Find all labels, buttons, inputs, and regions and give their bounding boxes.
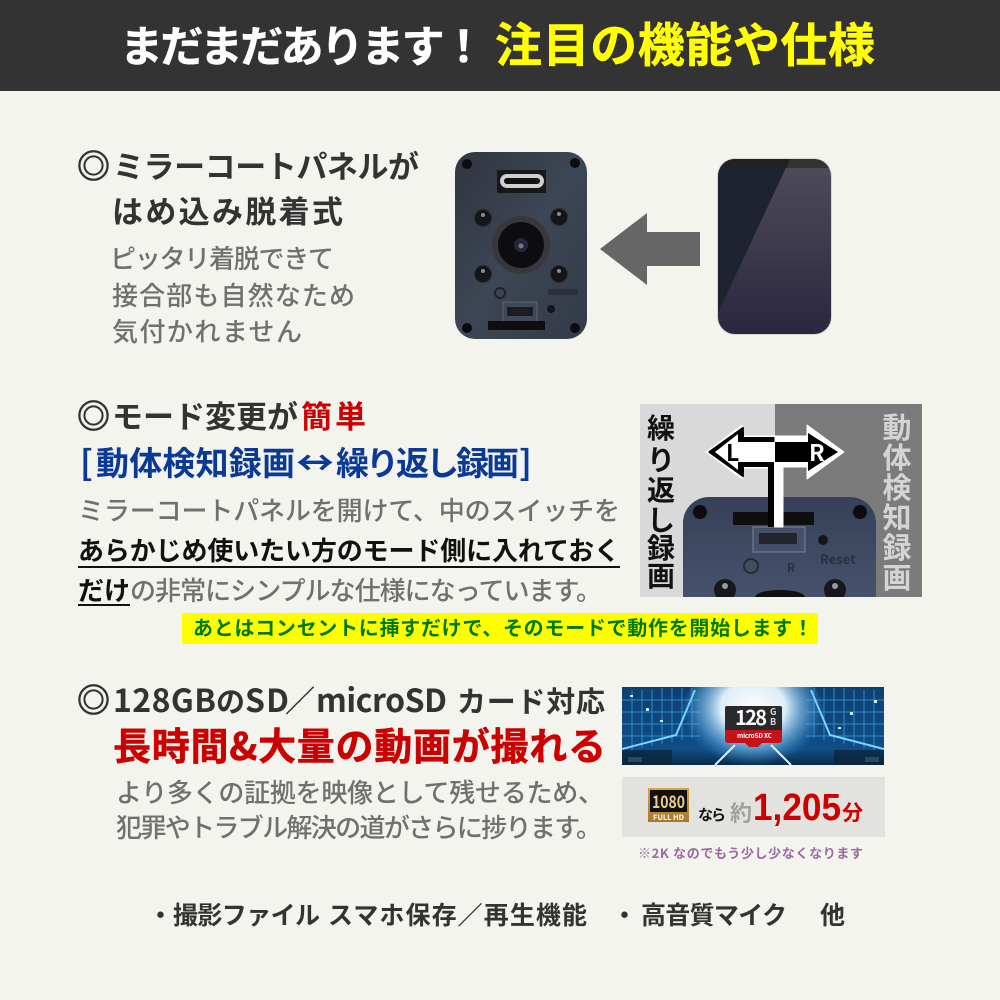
title banner: まだまだあります！ <box>120 13 485 75</box>
footer feature list: 高音質マイク <box>641 896 787 932</box>
capacity panel: なら <box>698 804 726 825</box>
section 2 body text <box>78 491 620 608</box>
lens <box>492 216 550 274</box>
section 3 heading: の <box>216 679 245 721</box>
section 2 heading: [ <box>80 436 93 485</box>
footer feature list <box>148 896 845 932</box>
section 1 heading: ◎ <box>77 140 110 188</box>
camera close-up <box>683 497 876 601</box>
camera close-up: R <box>787 559 795 576</box>
label: repeat recording: し <box>647 499 675 539</box>
label: repeat recording <box>647 407 675 595</box>
microSD card: B <box>770 715 776 728</box>
label: repeat recording: 返 <box>647 469 675 509</box>
screws <box>474 208 568 282</box>
image: 128GB microSD banner <box>622 687 884 765</box>
microSD card: microSD XC <box>737 730 773 740</box>
section 1 body text <box>110 239 355 349</box>
arrow: panel to module <box>600 213 700 285</box>
section 3 body text: 犯罪やトラブル解決の道がさらに捗ります。 <box>116 808 602 845</box>
title banner <box>0 0 1000 91</box>
section 2 body text: あらかじめ使いたい方のモード側に入れておく <box>78 531 620 568</box>
label: repeat recording: 繰 <box>647 407 675 447</box>
microSD card <box>725 702 782 747</box>
section 2 heading: ] <box>519 436 532 485</box>
section 2 heading <box>77 390 532 485</box>
L/R double arrow <box>706 425 844 527</box>
section 2 heading: ↔ <box>296 437 334 485</box>
capacity panel: 約 <box>730 796 752 828</box>
section 3 heading: ／ <box>285 677 315 721</box>
section 3 heading: ◎ <box>77 674 110 722</box>
capacity panel: 1,205 <box>753 787 841 829</box>
section 3 body text: より多くの証拠を映像として残せるため、 <box>116 773 604 810</box>
section 3 heading: カード対応 <box>457 679 605 721</box>
usb-c port <box>497 170 546 193</box>
badge: 1080 full hd <box>648 788 689 823</box>
label: motion detection recording: 動 <box>882 405 912 447</box>
section 1 heading: はめ込み脱着式 <box>112 187 343 232</box>
image: camera module <box>455 152 587 339</box>
title banner: 注目の機能や仕様 <box>495 7 875 76</box>
section 3 heading: 長時間&大量の動画が撮れる <box>113 716 606 771</box>
footer feature list: 撮影ファイル <box>173 896 320 932</box>
section 1 body text: 気付かれません <box>112 312 302 349</box>
section 2 body text: だけ <box>78 571 130 608</box>
section 1 heading <box>77 140 419 232</box>
L/R double arrow: L <box>726 434 739 468</box>
footer feature list: ・ <box>148 896 173 932</box>
section 2 body text: の非常にシンプルな仕様になっています。 <box>130 571 602 608</box>
label: motion detection recording: 知 <box>882 495 912 537</box>
microSD card: 128 <box>735 702 767 731</box>
capacity panel: 分 <box>842 797 863 827</box>
callout: yellow note: あとはコンセントに挿すだけで、そのモードで動作を開始します！ <box>193 612 813 641</box>
image: mode switch diagram <box>640 404 922 601</box>
section 2 heading: モード変更が <box>112 392 298 437</box>
label: motion detection recording: 録 <box>882 525 912 567</box>
section 1 body text: 接合部も自然なため <box>112 276 355 313</box>
label: repeat recording: 録 <box>647 527 675 567</box>
section 1 heading: ミラーコートパネルが <box>113 142 419 187</box>
label: repeat recording: り <box>647 439 675 479</box>
section 2 body text: ミラーコートパネルを開けて、中のスイッチを <box>78 491 620 528</box>
L/R double arrow: R <box>809 434 825 468</box>
label: motion detection recording: 検 <box>882 465 912 507</box>
camera close-up: Reset <box>820 549 856 568</box>
section 3 heading: 128GB <box>113 676 216 722</box>
section 2 heading: 繰り返し録画 <box>336 437 519 485</box>
footer feature list: ・ <box>612 896 637 932</box>
label: motion detection recording: 画 <box>882 555 912 597</box>
section 3 heading: microSD <box>316 676 447 722</box>
label: motion detection recording: 体 <box>882 435 912 477</box>
footer feature list: スマホ保存／再生機能 <box>328 896 587 932</box>
capacity panel <box>622 777 885 837</box>
section 3 body text <box>116 773 604 845</box>
microSD card: G <box>770 705 776 718</box>
switch and slot <box>488 288 578 330</box>
section 2 heading: 動体検知録画 <box>96 437 295 485</box>
section 2 heading: 簡単 <box>301 392 366 437</box>
section 2 heading: ◎ <box>77 390 110 438</box>
section 1 body text: ピッタリ着脱できて <box>110 239 334 276</box>
section 3 heading <box>77 674 606 771</box>
footer feature list: 他 <box>820 896 845 932</box>
badge: 1080 full hd: FULL HD <box>653 812 684 823</box>
badge: 1080 full hd: 1080 <box>652 788 685 813</box>
footnote: ※2K なのでもう少し少なくなります <box>638 843 863 862</box>
image: mirror panel <box>717 158 832 335</box>
label: repeat recording: 画 <box>647 555 675 595</box>
label: motion detection recording <box>882 405 912 597</box>
section 3 heading: SD <box>245 676 289 722</box>
